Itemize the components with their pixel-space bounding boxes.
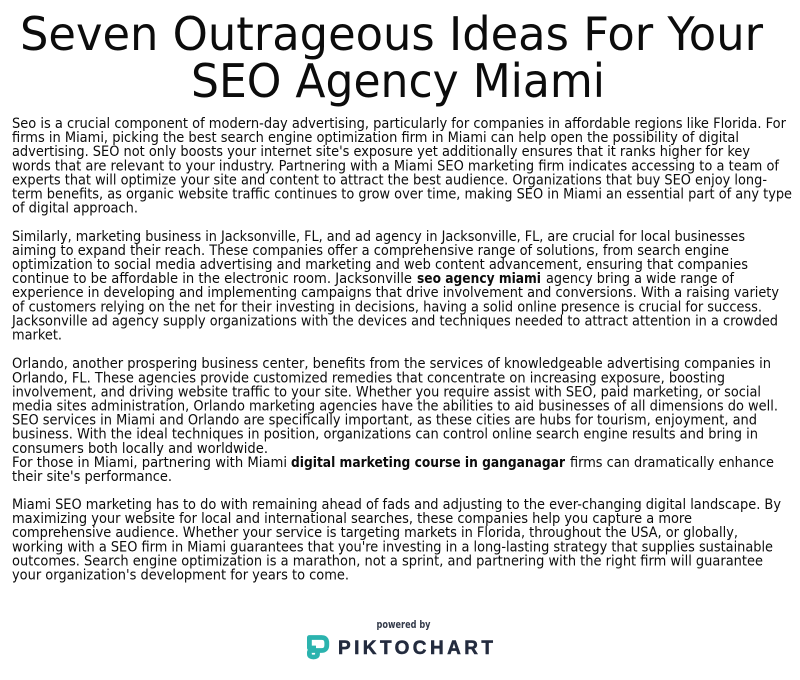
text block: paragraph 1: of digital approach. xyxy=(12,201,138,217)
text block: paragraph 2: market. xyxy=(12,328,62,344)
text block: paragraph 4: comprehensive audience. Whether your service is targeting markets in Florida, throughout the USA, or globally, xyxy=(12,525,738,541)
text block: paragraph 3: Orlando, FL. These agencies provide customized remedies that concentrate on increasing exposure, boosting xyxy=(12,370,725,386)
text block: paragraph 3: involvement, and driving website traffic to your site. Whether you require assist with SEO, paid marketing, or social xyxy=(12,384,761,400)
text block: paragraph 3: their site's performance. xyxy=(12,469,172,485)
icon: Piktochart logo xyxy=(309,638,327,657)
text block: paragraph 1: advertising. SEO not only boosts your internet site's exposure yet additionally ensures that it ranks higher for key xyxy=(12,144,750,160)
text block: paragraph 3: firms can dramatically enhance xyxy=(570,455,774,471)
text block: paragraph 3: consumers both locally and worldwide. xyxy=(12,441,268,457)
text block: paragraph 2: of customers relying on the net for their investing in decisions, having a solid online presence is crucial for success. xyxy=(12,299,762,315)
bold keyword: digital marketing course in ganganagar: digital marketing course in ganganagar xyxy=(291,455,565,471)
text block: paragraph 2: agency bring a wide range of xyxy=(546,271,735,287)
text block: paragraph 3: business. With the ideal techniques in position, organizations can control online search engine results and bring in xyxy=(12,427,758,443)
text block: paragraph 4: your organization's development for years to come. xyxy=(12,568,349,584)
text block: paragraph 2: aiming to expand their reach. These companies offer a comprehensive range of solutions, from search engine xyxy=(12,243,729,259)
text block: paragraph 3: For those in Miami, partnering with Miami xyxy=(12,455,287,471)
title: Seven Outrageous Ideas For Your xyxy=(20,7,763,61)
text block: paragraph 4: maximizing your website for local and international searches, these companies help you capture a more xyxy=(12,511,692,527)
footer: powered by Piktochart xyxy=(309,618,493,659)
text block: paragraph 3: SEO services in Miami and Orlando are specifically important, as these cities are hubs for tourism, enjoyment, and xyxy=(12,413,757,429)
title xyxy=(20,7,763,108)
wordmark: PIKTOCHART xyxy=(338,638,493,659)
text block: paragraph 2: optimization to social media advertising and marketing and web content advancement, ensuring that companies xyxy=(12,257,748,273)
text block: paragraph 1 xyxy=(12,116,792,217)
text block: paragraph 4 xyxy=(12,497,781,584)
text block: paragraph 2 xyxy=(11,229,779,344)
title: SEO Agency Miami xyxy=(191,54,605,108)
text block: paragraph 4: outcomes. Search engine optimization is a marathon, not a sprint, and partnering with the right firm will guarantee xyxy=(12,553,763,569)
bold keyword: seo agency miami: seo agency miami xyxy=(417,271,541,287)
text block: paragraph 3 xyxy=(12,356,778,485)
text block: paragraph 2: continue to be affordable in the electronic room. Jacksonville xyxy=(12,271,412,287)
text block: paragraph 1: firms in Miami, picking the best search engine optimization firm in Miami can help open the possibility of digital xyxy=(12,130,739,146)
powered by label: powered by xyxy=(376,618,430,631)
text block: paragraph 2: Similarly, marketing business in Jacksonville, FL, and ad agency in Jacksonville, FL, are crucial for local businesses xyxy=(12,229,745,245)
